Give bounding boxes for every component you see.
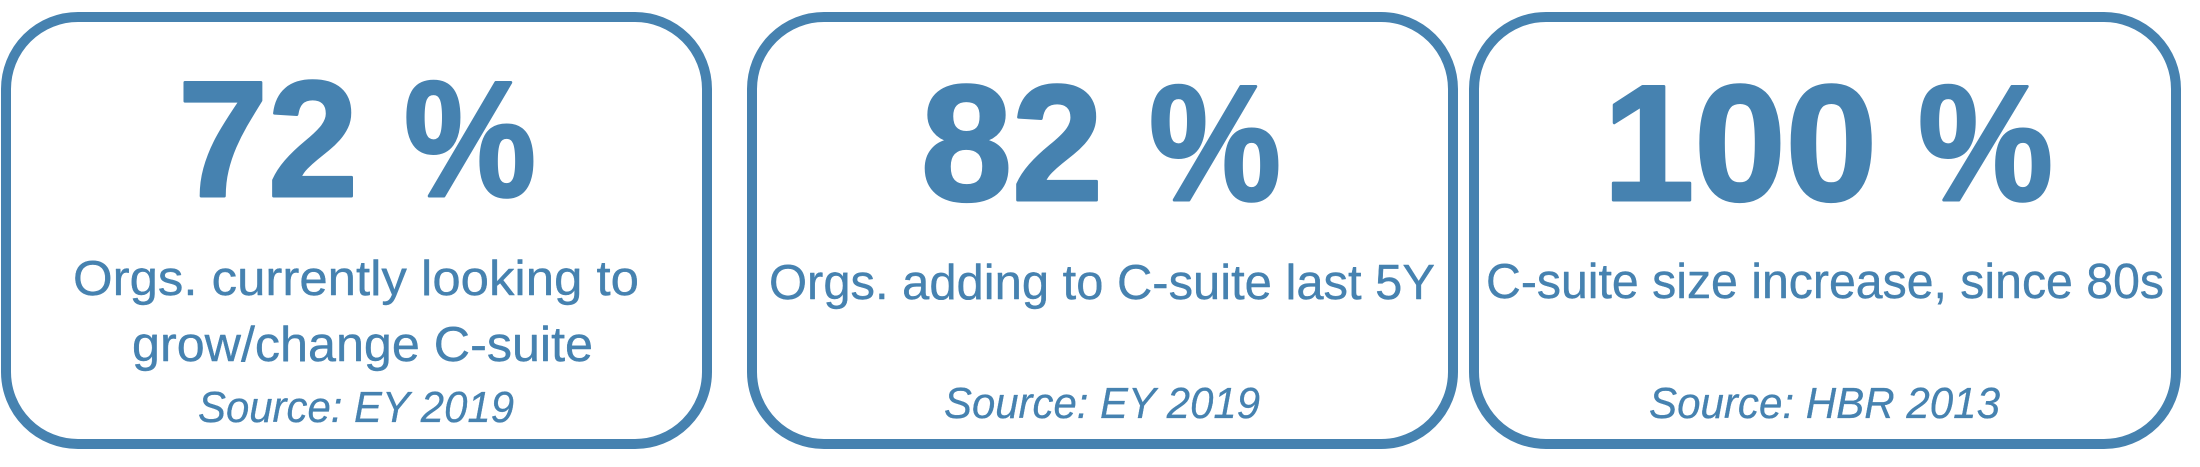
description: orgs adding to C-suite: Orgs. adding to C-suite last 5Y [769, 256, 1435, 310]
card outline [6, 17, 707, 444]
card outline [1474, 17, 2176, 444]
description: orgs looking to grow or change C-suite [73, 252, 639, 372]
big number: 72 %: 72 [178, 47, 358, 231]
description: orgs looking to grow or change C-suite: grow/change C-suite [132, 318, 593, 372]
panel: 72 percent card [6, 17, 707, 444]
panel: 100 percent card [1474, 17, 2176, 444]
big number: 100 %: 100 [1603, 51, 1877, 235]
source: HBR 2013: Source: HBR 2013 [1649, 379, 2000, 428]
big number: 72 %: % [404, 47, 536, 231]
card outline [752, 17, 1453, 444]
description: C-suite size increase: C-suite size increase, since 80s [1486, 255, 2164, 309]
big number: 72 % [178, 47, 536, 231]
big number: 100 % [1603, 51, 2053, 235]
panel: 82 percent card [752, 17, 1453, 444]
big number: 100 %: % [1918, 51, 2053, 235]
big number: 82 %: 82 [921, 51, 1103, 235]
big number: 82 % [921, 51, 1281, 235]
big number: 82 %: % [1149, 51, 1281, 235]
source: EY 2019: Source: EY 2019 [198, 383, 514, 432]
description: orgs looking to grow or change C-suite: Orgs. currently looking to [73, 252, 639, 306]
source: EY 2019: Source: EY 2019 [944, 379, 1260, 428]
